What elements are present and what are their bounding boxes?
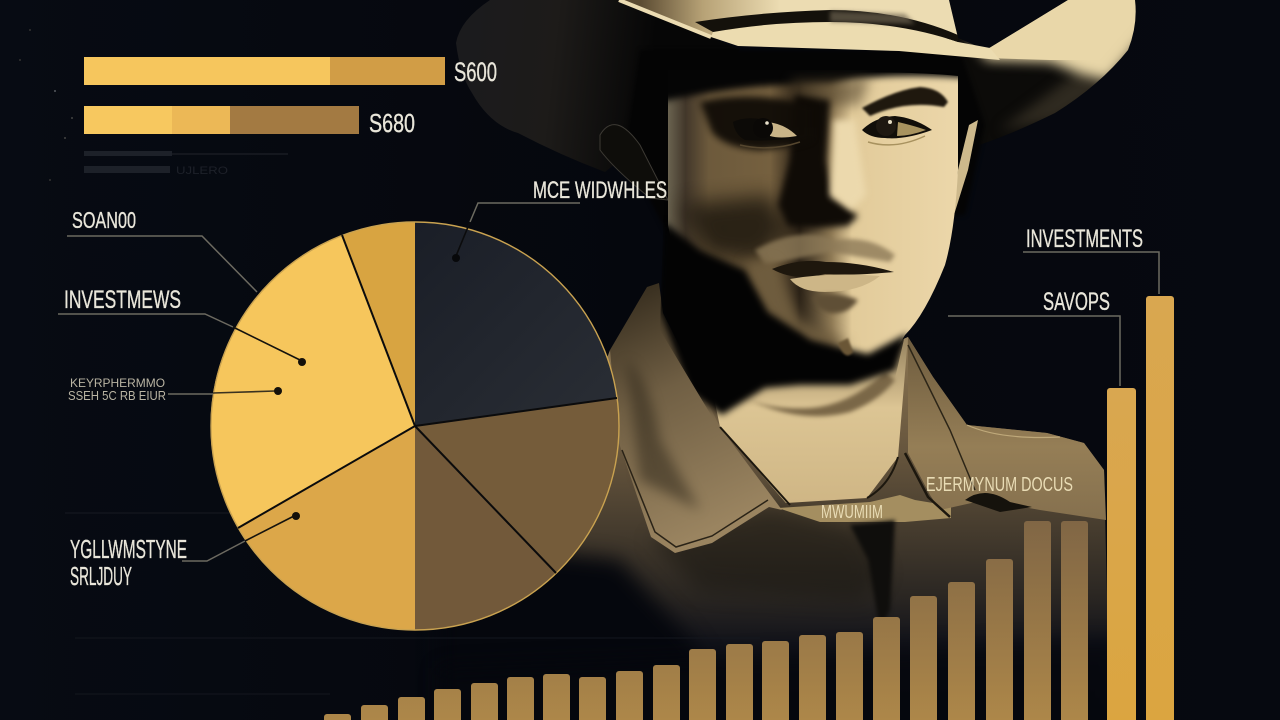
jaw shadow (660, 222, 908, 415)
shirt left fade (440, 540, 760, 720)
mouth-area midtone (745, 262, 850, 350)
top bar chart (84, 57, 497, 177)
callout: MCE WIDWHLES (452, 177, 667, 262)
growth bar chart (324, 521, 1088, 720)
hat band (695, 10, 958, 42)
collar right and shoulder (908, 337, 1106, 520)
moustache stubble (755, 234, 895, 265)
horizontal rules (65, 513, 760, 694)
label: INVESTMENTS: INVESTMENTS (1026, 225, 1143, 253)
soul patch (812, 294, 858, 313)
face (668, 72, 958, 378)
slice: dark brown (415, 426, 556, 630)
callout: small text: SSEH 5C RB EIUR (68, 388, 166, 403)
callout: INVESTMEWS (58, 286, 306, 366)
nose highlight (830, 120, 866, 210)
forehead brown (790, 78, 870, 108)
callout: YGLLWMSTYNE: YGLLWMSTYNE (70, 534, 187, 564)
callout: SOAN00: SOAN00 (72, 207, 136, 233)
callout: SOAN00 (67, 207, 257, 292)
lower cheek shadow (680, 195, 790, 262)
hat underbrim right (958, 0, 1136, 136)
callout: small text (68, 376, 282, 403)
shirt label: right: EJERMYNUM DOCUS (926, 474, 1073, 496)
left eye (733, 118, 800, 148)
right brow (862, 87, 948, 116)
portrait: cowboy (440, 0, 1150, 720)
callout: YGLLWMSTYNE (70, 512, 300, 591)
slice: gold (238, 426, 415, 630)
shirt body (500, 337, 1110, 720)
left eye socket (700, 97, 812, 150)
mouth (772, 261, 894, 277)
label: S680: S680 (369, 108, 415, 138)
hair (625, 50, 985, 235)
ear right sliver (953, 120, 978, 218)
callout: YGLLWMSTYNE: SRLJDUY (70, 561, 132, 591)
ear (600, 125, 668, 200)
shirt placket (850, 520, 895, 630)
slice: navy (415, 222, 617, 426)
forehead shadow (668, 72, 958, 105)
shirt label: left: MWUMIIM (821, 502, 883, 522)
faint bars (84, 151, 288, 173)
bar: second (84, 106, 359, 134)
slice: amber (342, 222, 415, 426)
chin dimple (838, 338, 853, 355)
slice: yellow (210, 235, 415, 528)
collar left (610, 283, 782, 553)
tall bar: savings (948, 288, 1136, 720)
lower lip (790, 275, 880, 292)
label: SAVOPS: SAVOPS (1043, 288, 1110, 316)
tall bar: investments (1023, 225, 1174, 720)
callout: small text: KEYRPHERMMO (70, 376, 165, 390)
hat crown (619, 0, 958, 45)
faint label: UJLERO (176, 165, 229, 177)
bar: first (84, 57, 445, 85)
shirt lower fade (440, 640, 1120, 720)
collar strip (778, 495, 951, 522)
neck (700, 330, 908, 503)
face shading (660, 55, 965, 415)
pie chart (210, 222, 619, 630)
hat brim edge (619, 0, 711, 37)
callout: INVESTMEWS: INVESTMEWS (64, 286, 181, 314)
right eye (862, 116, 932, 145)
label: S600: S600 (454, 57, 497, 87)
hat brim cream (711, 22, 1000, 60)
callout: MCE WIDWHLES: MCE WIDWHLES (533, 177, 667, 204)
shirt shadow folds (650, 505, 885, 600)
nose shadow (778, 95, 858, 228)
hat underbrim left (456, 0, 740, 172)
slice: brown (415, 398, 619, 573)
